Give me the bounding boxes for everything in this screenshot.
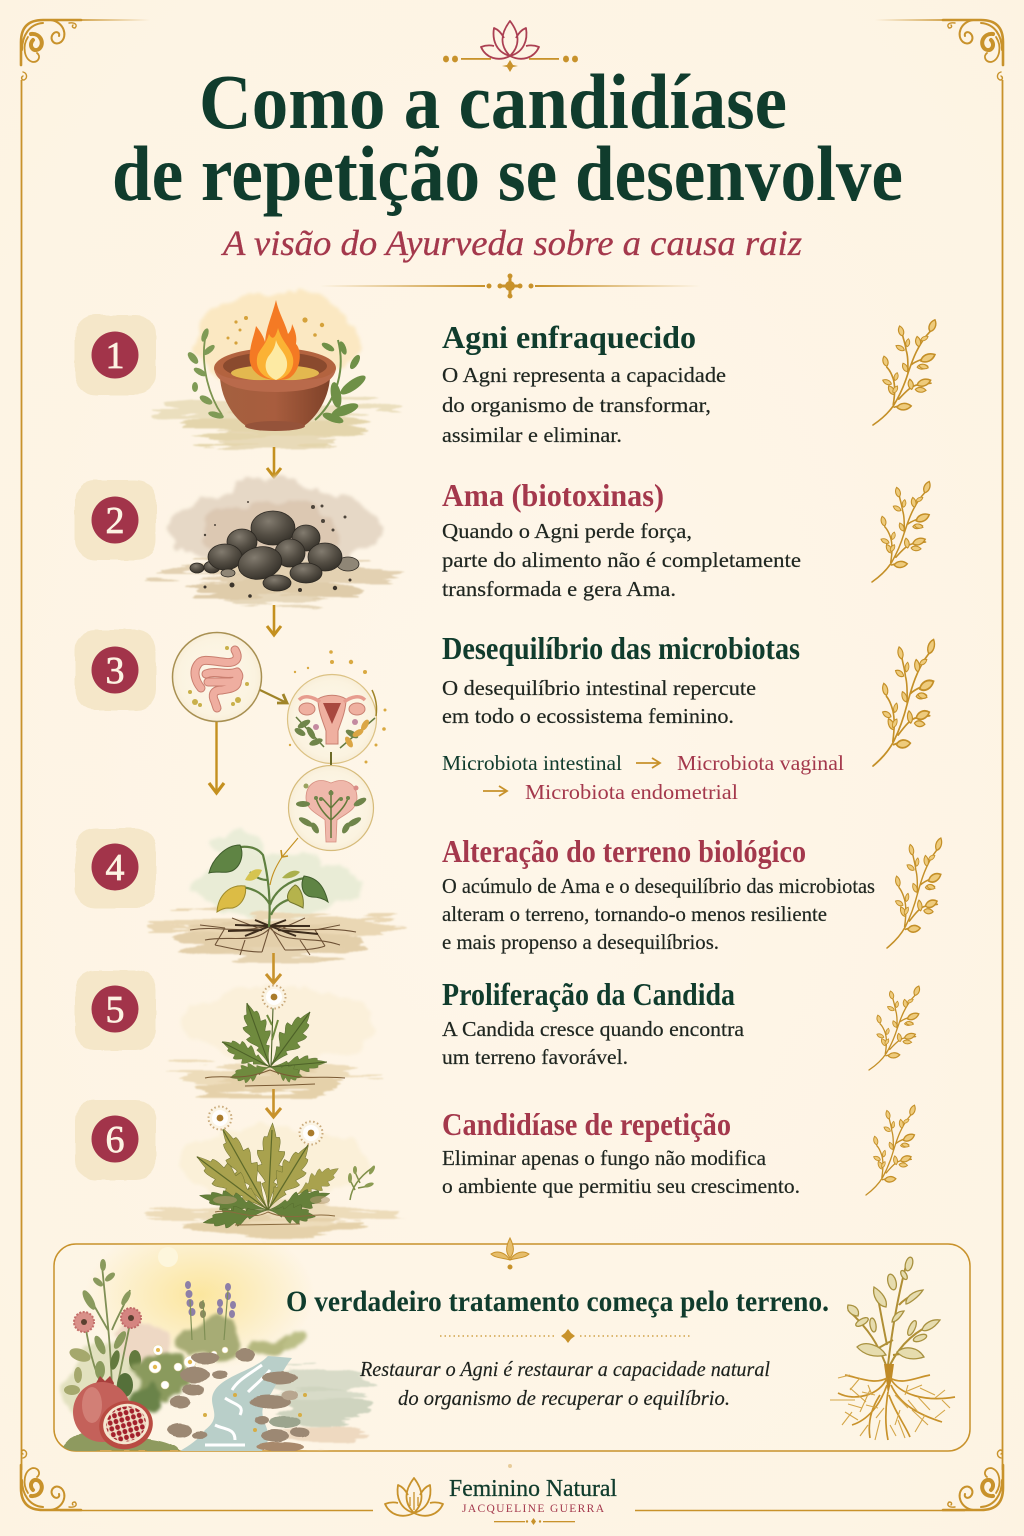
icon: gold branch 4 bbox=[887, 837, 943, 948]
text 2: transformada e gera Ama. bbox=[442, 577, 676, 601]
badge 4: 4 bbox=[106, 847, 124, 889]
heading 4: Alteração do terreno biológico bbox=[442, 833, 806, 869]
text 6: o ambiente que permitiu seu crescimento. bbox=[442, 1174, 800, 1198]
subtitle: A visão do Ayurveda sobre a causa raiz bbox=[221, 223, 802, 263]
microbiota flow bbox=[442, 751, 844, 804]
badge 4 bbox=[75, 828, 156, 908]
title bbox=[112, 58, 903, 217]
badge 2: 2 bbox=[106, 500, 124, 542]
badge 3: 3 bbox=[106, 650, 124, 692]
text 3: em todo o ecossistema feminino. bbox=[442, 704, 734, 728]
title: Como a candidíase bbox=[199, 58, 787, 145]
badge 5: 5 bbox=[106, 989, 124, 1031]
icon: gold branch 5 bbox=[869, 985, 921, 1070]
text 5: um terreno favorável. bbox=[442, 1045, 628, 1069]
heading 5: Proliferação da Candida bbox=[442, 976, 735, 1012]
illustration: wilting plant on cracked soil bbox=[147, 830, 403, 960]
badge 6 bbox=[75, 1100, 156, 1180]
illustration: intestine circle bbox=[172, 632, 262, 722]
callout text bbox=[359, 1357, 770, 1410]
illustration: dandelion sprout bbox=[165, 986, 381, 1093]
heading 6: Candidíase de repetição bbox=[442, 1106, 731, 1142]
text 2 bbox=[442, 519, 801, 601]
callout divider bbox=[440, 1329, 690, 1343]
illustration: overgrown dandelion bbox=[143, 1106, 403, 1236]
heading 1: Agni enfraquecido bbox=[442, 319, 696, 355]
badge 1: 1 bbox=[106, 335, 124, 377]
text 5 bbox=[442, 1017, 745, 1069]
panel: step 3 bbox=[75, 630, 936, 850]
icon: gold branch 3 bbox=[873, 638, 936, 766]
heading 2: Ama (biotoxinas) bbox=[442, 477, 664, 513]
icon: footer lotus bbox=[385, 1478, 443, 1516]
arrow: intestine down bbox=[209, 722, 224, 793]
icon: gold branch 6 bbox=[866, 1104, 917, 1195]
brand name: Feminino Natural bbox=[449, 1476, 617, 1502]
icon: callout top ornament bbox=[491, 1238, 529, 1269]
text 3: O desequilíbrio intestinal repercute bbox=[442, 676, 756, 700]
icon: gold branch 1 bbox=[873, 319, 938, 425]
panel: step 1 bbox=[75, 290, 938, 449]
arrow 1 to 2 bbox=[267, 447, 281, 477]
callout text: do organismo de recuperar o equilíbrio. bbox=[398, 1386, 730, 1410]
title: de repetição se desenvolve bbox=[112, 130, 903, 217]
top lotus ornament bbox=[443, 21, 578, 72]
text 2: parte do alimento não é completamente bbox=[442, 548, 801, 572]
arrow: intestine to uterus bbox=[260, 690, 287, 703]
brand author: JACQUELINE GUERRA bbox=[462, 1503, 605, 1515]
badge 2 bbox=[75, 480, 156, 560]
text 1: do organismo de transformar, bbox=[442, 393, 711, 417]
text 4: e mais propenso a desequilíbrios. bbox=[442, 930, 719, 954]
title divider bbox=[320, 274, 700, 298]
text 2: Quando o Agni perde força, bbox=[442, 519, 692, 543]
microbiota flow: Microbiota endometrial bbox=[525, 780, 738, 804]
badge 3 bbox=[75, 630, 156, 710]
illustration: uterus circle bbox=[288, 650, 386, 764]
panel: closing callout bbox=[54, 1220, 970, 1455]
badge 1 bbox=[75, 315, 156, 395]
text 4 bbox=[442, 874, 875, 954]
footer flourish bbox=[494, 1464, 575, 1525]
footer logo bbox=[385, 1464, 617, 1525]
heading 3: Desequilíbrio das microbiotas bbox=[442, 630, 800, 666]
text 4: alteram o terreno, tornando-o menos resiliente bbox=[442, 902, 827, 926]
microbiota flow: Microbiota vaginal bbox=[677, 751, 844, 775]
text 1: O Agni representa a capacidade bbox=[442, 363, 726, 387]
text 6: Eliminar apenas o fungo não modifica bbox=[442, 1146, 767, 1170]
panel: step 5 bbox=[75, 970, 921, 1093]
illustration: pile of dark stones bbox=[151, 480, 399, 606]
arrow 5 to 6 bbox=[266, 1089, 281, 1117]
text 3 bbox=[442, 676, 756, 728]
microbiota flow: Microbiota intestinal bbox=[442, 751, 622, 775]
arrow 4 to 5 bbox=[266, 953, 281, 983]
badge 6: 6 bbox=[106, 1119, 124, 1161]
illustration: garden, pomegranate and stream bbox=[62, 1220, 370, 1455]
callout text: Restaurar o Agni é restaurar a capacidade natural bbox=[359, 1357, 770, 1381]
illustration: endometrium circle bbox=[288, 766, 374, 850]
icon: gold branch 2 bbox=[872, 480, 932, 582]
text 4: O acúmulo de Ama e o desequilíbrio das microbiotas bbox=[442, 874, 875, 898]
callout heading: O verdadeiro tratamento começa pelo terreno. bbox=[286, 1285, 829, 1318]
text 1: assimilar e eliminar. bbox=[442, 423, 622, 447]
illustration: plant with roots bbox=[830, 1256, 955, 1440]
arrow 2 to 3 bbox=[267, 605, 281, 635]
badge 5 bbox=[75, 970, 156, 1050]
arrow: uterus to endometrium bbox=[326, 752, 336, 778]
panel: step 2 bbox=[75, 477, 932, 606]
panel: step 6 bbox=[75, 1100, 917, 1236]
panel: step 4 bbox=[75, 828, 943, 960]
text 1 bbox=[442, 363, 726, 447]
illustration: fire in clay bowl bbox=[151, 290, 399, 449]
text 6 bbox=[442, 1146, 800, 1198]
text 5: A Candida cresce quando encontra bbox=[442, 1017, 745, 1041]
